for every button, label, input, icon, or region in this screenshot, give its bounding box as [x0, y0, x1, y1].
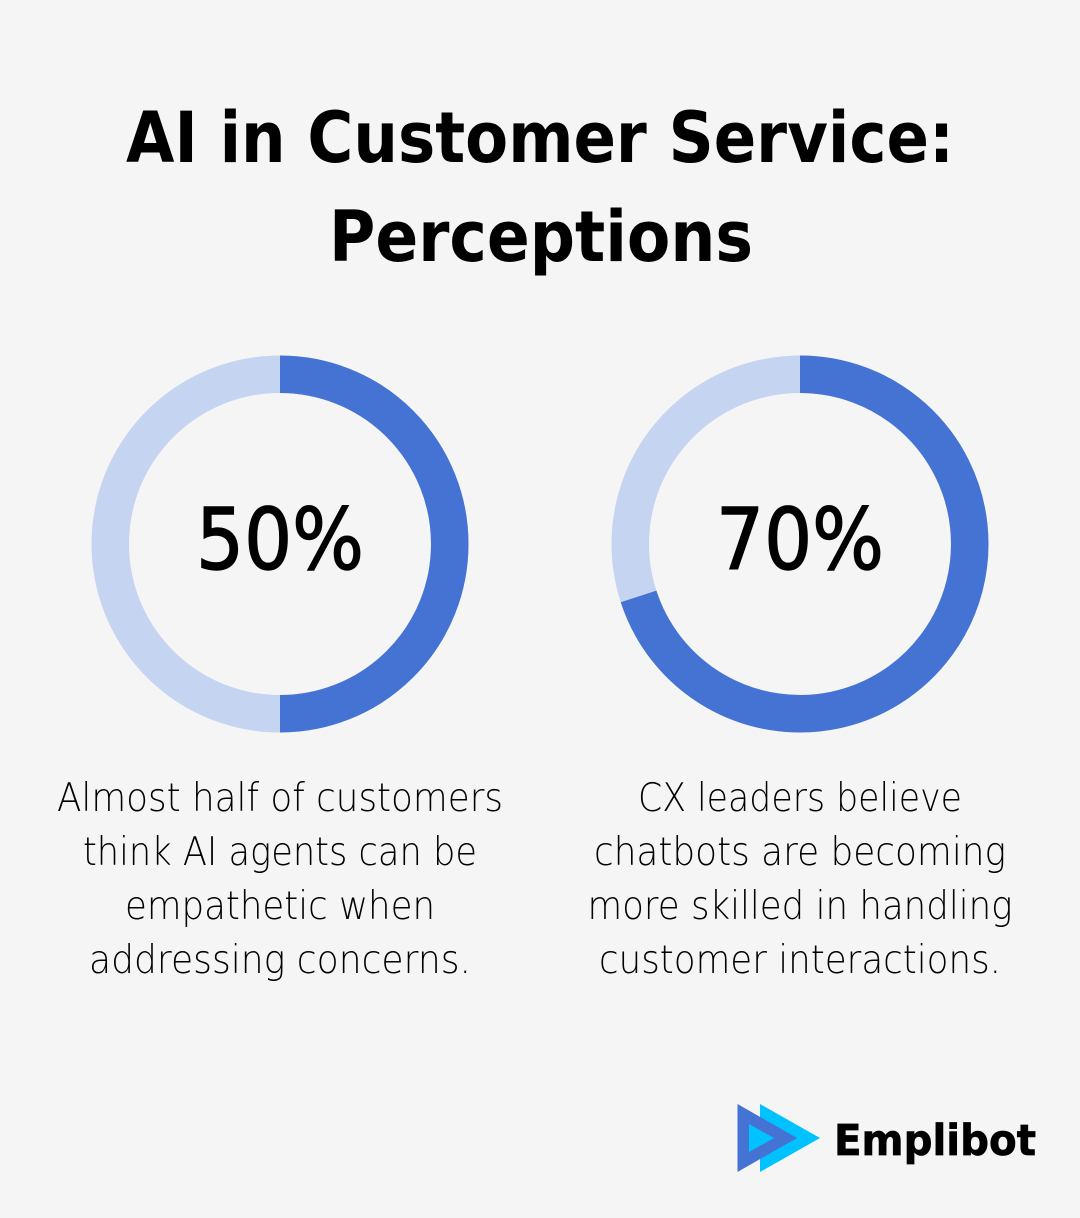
description: 50% stat: think AI agents can be — [83, 830, 477, 875]
title: AI in Customer Service: — [126, 97, 954, 179]
icon: play triangles — [738, 1104, 820, 1172]
panel: 50% stat — [57, 374, 503, 983]
logo: Emplibot — [738, 1104, 1036, 1172]
description: 70% stat: CX leaders believe — [638, 776, 962, 821]
description: 50% stat: Almost half of customers — [57, 776, 503, 821]
wordmark: Emplibot — [834, 1116, 1036, 1166]
description: 50% stat — [57, 776, 503, 983]
donut chart: 70% — [630, 374, 970, 714]
donut chart: 50% — [110, 374, 450, 714]
description: 50% stat: addressing concerns. — [89, 938, 471, 983]
value: 50%: 50% — [196, 491, 364, 590]
description: 50% stat: empathetic when — [125, 884, 435, 929]
description: 70% stat: customer interactions. — [599, 938, 1001, 983]
description: 70% stat — [588, 776, 1012, 983]
title: Perceptions — [329, 196, 753, 278]
value: 70%: 70% — [716, 491, 884, 590]
title — [126, 97, 954, 278]
description: 70% stat: chatbots are becoming — [594, 830, 1006, 875]
description: 70% stat: more skilled in handling — [588, 884, 1012, 929]
panel: 70% stat — [588, 374, 1012, 983]
